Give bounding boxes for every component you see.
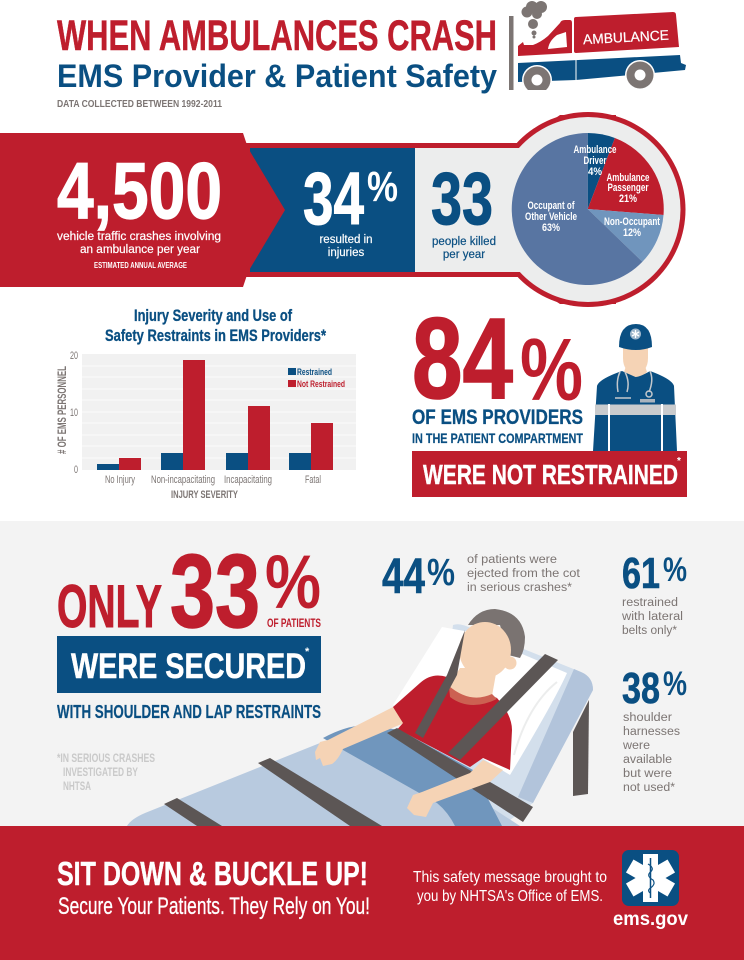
panel: 4,500 red arrow: an ambulance per year (80, 244, 200, 256)
headline: only 33% of patients: OF PATIENTS (267, 616, 321, 630)
headline: only 33% of patients: ONLY (57, 573, 162, 640)
stat: 33 people killed: 33 (431, 157, 493, 240)
stat: 38% harnesses not used: 38 (622, 664, 660, 713)
pie chart: people killed by role (512, 133, 664, 285)
stat: 38% harnesses not used: shoulder (623, 712, 672, 724)
subheading: shoulder and lap restraints: WITH SHOULDER AND LAP RESTRAINTS (57, 701, 321, 722)
panel: 84% not restrained: OF EMS PROVIDERS (412, 406, 583, 429)
stat: 38% harnesses not used: available (623, 754, 672, 766)
stat: 34% injuries: injuries (328, 247, 364, 259)
footnote (57, 751, 155, 793)
icon: crashed ambulance (509, 1, 686, 96)
panel: patient safety (0, 521, 744, 826)
footnote: INVESTIGATED BY (63, 765, 138, 779)
bar chart (55, 350, 356, 501)
pie chart: people killed by role: Ambulance (574, 144, 616, 156)
stat: 33 people killed (431, 157, 496, 261)
title: WHEN AMBULANCES CRASH (57, 12, 497, 60)
panel: injury severity chart (55, 306, 356, 501)
stat: 38% harnesses not used: but were (623, 768, 672, 780)
data range note: DATA COLLECTED BETWEEN 1992-2011 (57, 98, 222, 110)
icon: EMS provider (593, 324, 677, 451)
stat: 38% harnesses not used: not used* (623, 782, 676, 794)
stat: 34% injuries: % (367, 163, 398, 211)
pie chart: people killed by role: Non-Occupant (604, 216, 660, 228)
stat: 33 people killed: people killed (432, 236, 496, 248)
stat: 34% injuries: resulted in (319, 234, 373, 246)
bar chart: 0 (74, 464, 78, 476)
panel: 4,500 red arrow (0, 133, 285, 287)
bar chart: Incapacitating (224, 474, 272, 486)
footnote: *IN SERIOUS CRASHES (57, 751, 155, 765)
stat: 61% lateral belts (621, 549, 687, 637)
callout: were not restrained (412, 451, 687, 497)
bar chart: Non-incapacitating (151, 474, 215, 486)
headline: only 33% of patients: 33 (170, 534, 260, 650)
callout: were secured: * (305, 646, 310, 658)
panel: 84% not restrained (412, 295, 687, 497)
bar chart: 10 (70, 407, 78, 419)
chart legend: Restrained (297, 367, 332, 377)
stat: 38% harnesses not used: % (663, 665, 687, 703)
headline: only 33% of patients (57, 534, 321, 650)
stat: 38% harnesses not used (622, 664, 687, 794)
callout: were secured (57, 636, 321, 693)
stat: 44% ejected: 44 (382, 548, 425, 604)
panel: 84% not restrained: 84 (412, 295, 513, 423)
callout: were not restrained: * (677, 456, 681, 467)
panel: footer (0, 826, 744, 960)
bar chart: 20 (70, 350, 78, 362)
pie chart: people killed by role: 21% (619, 193, 637, 205)
stat: 44% ejected: ejected from the cot (467, 568, 581, 580)
chart legend: Not Restrained (297, 379, 345, 389)
stat: 38% harnesses not used: were (622, 740, 650, 752)
chart legend (288, 367, 345, 389)
bar chart: No Injury (105, 474, 135, 486)
panel: 4,500 red arrow: ESTIMATED ANNUAL AVERAGE (94, 261, 188, 270)
panel: 4,500 red arrow: vehicle traffic crashes involving (57, 231, 221, 243)
stat: 61% lateral belts: belts only* (622, 625, 678, 637)
stat: 61% lateral belts: % (663, 551, 687, 589)
stat: 44% ejected (382, 548, 581, 604)
pie chart: people killed by role: 12% (623, 227, 641, 239)
panel: 84% not restrained: IN THE PATIENT COMPARTMENT (412, 430, 583, 446)
stat: 33 people killed: per year (443, 249, 485, 261)
subtitle: EMS Provider & Patient Safety (57, 58, 497, 94)
pie chart: people killed by role: Passenger (608, 182, 649, 194)
chart title: Injury Severity and Use of (134, 306, 292, 325)
panel: 4,500 red arrow: 4,500 (57, 146, 222, 235)
icon: star of life logo (622, 850, 679, 906)
ems.gov wordmark: ems.gov (613, 909, 688, 930)
panel: statistics band (0, 112, 686, 307)
chart title (105, 306, 326, 345)
headline: only 33% of patients: % (265, 540, 321, 625)
stat: 44% ejected: in serious crashes* (467, 582, 573, 594)
footer tagline: Secure Your Patients. They Rely on You! (58, 893, 370, 920)
callout: were secured: WERE SECURED (71, 647, 306, 686)
stat: 34% injuries: 34 (303, 157, 364, 240)
panel: 84% not restrained: % (520, 320, 583, 419)
chart title: Safety Restraints in EMS Providers* (105, 326, 326, 345)
stat: 61% lateral belts: restrained (622, 597, 678, 609)
safety message (413, 869, 607, 905)
stat: 44% ejected: of patients were (467, 554, 557, 566)
icon: crashed ambulance: AMBULANCE (583, 27, 669, 47)
illustration: patient on cot (127, 609, 593, 826)
bar chart: Fatal (305, 474, 321, 486)
stat: 61% lateral belts: 61 (622, 549, 660, 598)
stat: 44% ejected: % (427, 552, 455, 594)
bar chart: INJURY SEVERITY (171, 489, 238, 501)
footer headline: SIT DOWN & BUCKLE UP! (57, 855, 368, 892)
pie chart: people killed by role: 63% (542, 222, 560, 234)
pie chart: people killed by role: 4% (588, 166, 602, 178)
stat: 38% harnesses not used: harnesses (623, 726, 680, 738)
pie chart: people killed by role: Driver (584, 155, 607, 167)
bar chart: # OF EMS PERSONNEL (55, 366, 69, 454)
safety message: you by NHTSA's Office of EMS. (417, 888, 603, 905)
pie chart: people killed by role: Ambulance (606, 172, 650, 184)
safety message: This safety message brought to (413, 869, 607, 886)
pie chart: people killed by role: Occupant of (528, 200, 575, 212)
footnote: NHTSA (63, 779, 91, 793)
pie chart: people killed by role: Other Vehicle (525, 211, 577, 223)
stat: 61% lateral belts: with lateral (621, 611, 683, 623)
